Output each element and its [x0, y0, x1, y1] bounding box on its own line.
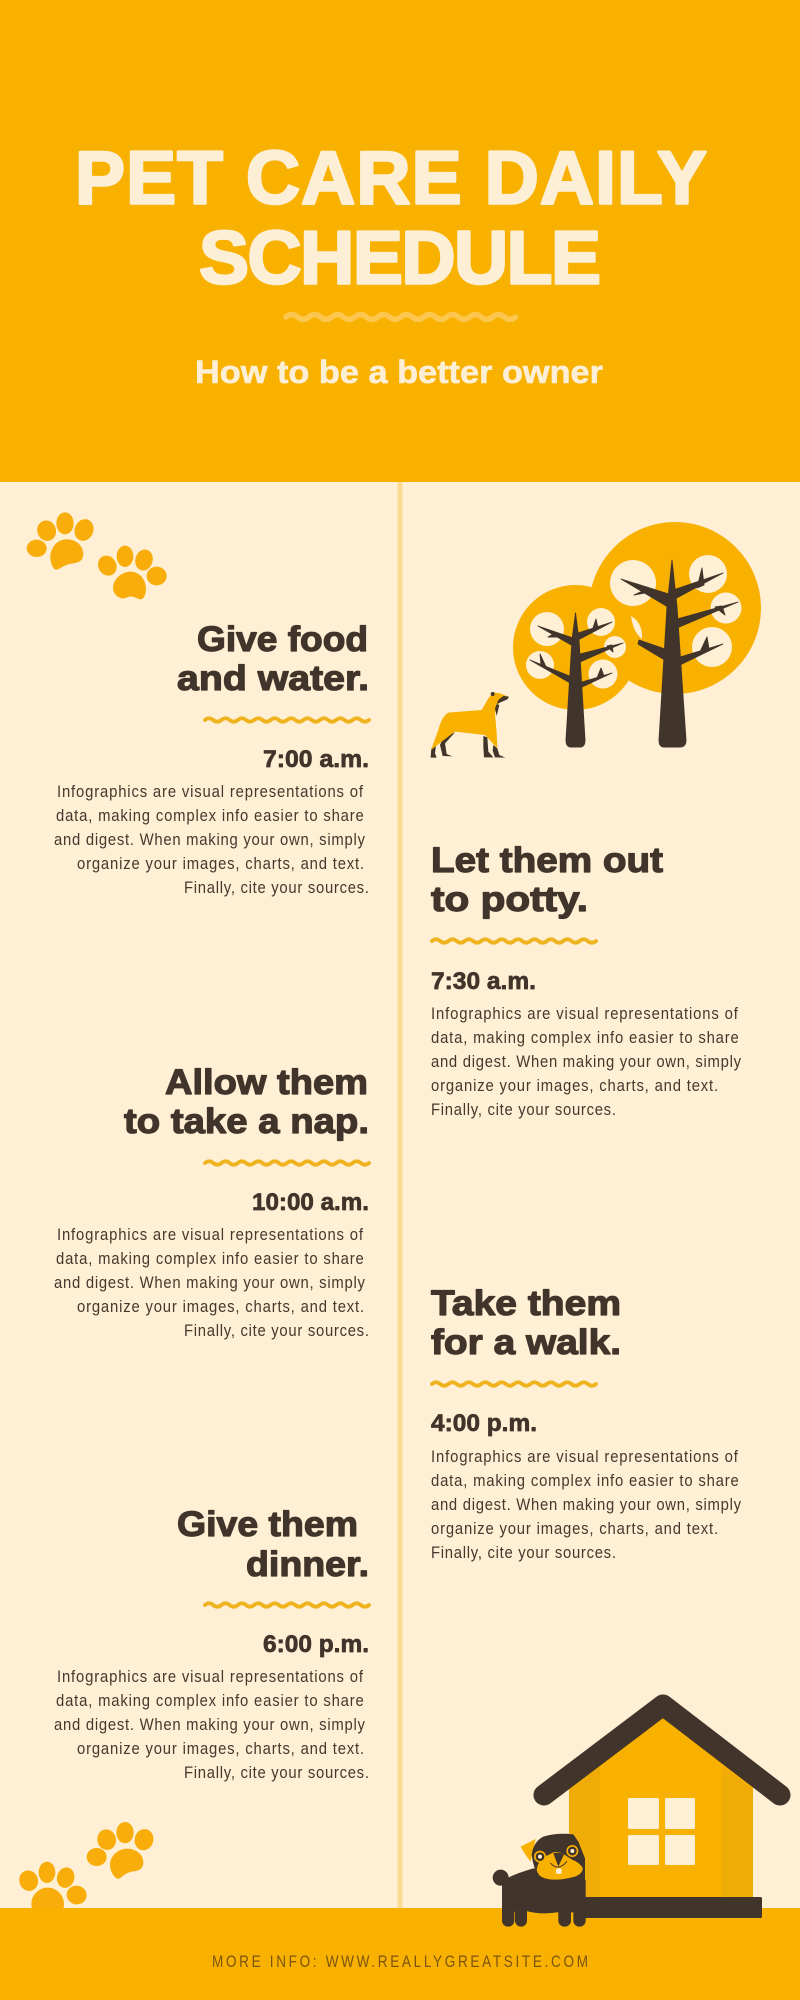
heading: to take a nap. [124, 1102, 369, 1141]
icon: paw prints top [27, 512, 167, 599]
squiggle [432, 939, 596, 943]
body text: organize your images, charts, and text. [431, 1077, 718, 1095]
heading [177, 620, 369, 698]
header squiggle [286, 315, 516, 319]
heading [431, 841, 663, 919]
header panel [0, 0, 800, 482]
heading: Let them out [431, 841, 663, 880]
squiggle [432, 1382, 596, 1386]
heading: and water. [177, 659, 369, 698]
body text: Finally, cite your sources. [431, 1544, 616, 1562]
title: SCHEDULE [199, 216, 601, 300]
body text: organize your images, charts, and text. [77, 1740, 364, 1758]
illustration: dog looking up [431, 692, 509, 758]
body text: Infographics are visual representations of [431, 1448, 739, 1466]
heading [124, 1063, 369, 1141]
body text: Finally, cite your sources. [184, 1322, 369, 1340]
section: give food and water [54, 620, 369, 897]
body text: data, making complex info easier to share [431, 1029, 739, 1047]
title: PET CARE DAILY [75, 136, 707, 220]
body text: Infographics are visual representations of [431, 1005, 739, 1023]
section: take them for a walk [431, 1284, 741, 1562]
heading: dinner. [246, 1545, 369, 1584]
body text: Infographics are visual representations of [57, 783, 364, 801]
section: allow them to take a nap [54, 1063, 369, 1340]
heading: for a walk. [431, 1323, 621, 1362]
body text [54, 783, 369, 897]
heading [431, 1284, 621, 1362]
heading: Give them [177, 1505, 358, 1544]
footer bar [0, 1908, 800, 2000]
time: 10:00 a.m. [252, 1189, 369, 1216]
body text: Finally, cite your sources. [184, 1764, 369, 1782]
body text: and digest. When making your own, simply [431, 1053, 741, 1071]
time: 7:00 a.m. [263, 746, 369, 773]
body text: data, making complex info easier to share [56, 807, 364, 825]
body text [54, 1226, 369, 1340]
body text: Finally, cite your sources. [431, 1101, 616, 1119]
squiggle [205, 1603, 369, 1607]
heading: to potty. [431, 880, 588, 919]
time: 4:00 p.m. [431, 1410, 537, 1437]
body text [54, 1668, 369, 1782]
body text: organize your images, charts, and text. [431, 1520, 718, 1538]
illustration: pug [493, 1834, 586, 1927]
squiggle [205, 1161, 369, 1165]
heading [177, 1505, 369, 1584]
body text: Infographics are visual representations of [57, 1226, 364, 1244]
body text: data, making complex info easier to share [56, 1692, 364, 1710]
section: let them out to potty [431, 841, 741, 1119]
illustration: trees [513, 522, 761, 747]
body text [431, 1005, 741, 1119]
body text: data, making complex info easier to share [56, 1250, 364, 1268]
footer text: MORE INFO: WWW.REALLYGREATSITE.COM [212, 1953, 588, 1971]
body text: organize your images, charts, and text. [77, 1298, 364, 1316]
body text: Infographics are visual representations of [57, 1668, 364, 1686]
heading: Take them [431, 1284, 621, 1323]
body text: data, making complex info easier to share [431, 1472, 739, 1490]
squiggle [205, 718, 369, 722]
body text: Finally, cite your sources. [184, 879, 369, 897]
time: 6:00 p.m. [263, 1631, 369, 1658]
section: give them dinner [54, 1505, 369, 1782]
body text: organize your images, charts, and text. [77, 855, 364, 873]
body text [431, 1448, 741, 1562]
center divider [398, 482, 402, 1908]
body text: and digest. When making your own, simply [431, 1496, 741, 1514]
heading: Give food [197, 620, 368, 659]
illustration: dog house [544, 1705, 780, 1918]
subtitle: How to be a better owner [195, 354, 603, 390]
heading: Allow them [165, 1063, 368, 1102]
time: 7:30 a.m. [431, 968, 536, 995]
body text: and digest. When making your own, simply [54, 831, 365, 849]
title [75, 136, 707, 300]
body text: and digest. When making your own, simply [54, 1274, 365, 1292]
icon: paw prints bottom [16, 1822, 156, 1920]
body text: and digest. When making your own, simply [54, 1716, 365, 1734]
